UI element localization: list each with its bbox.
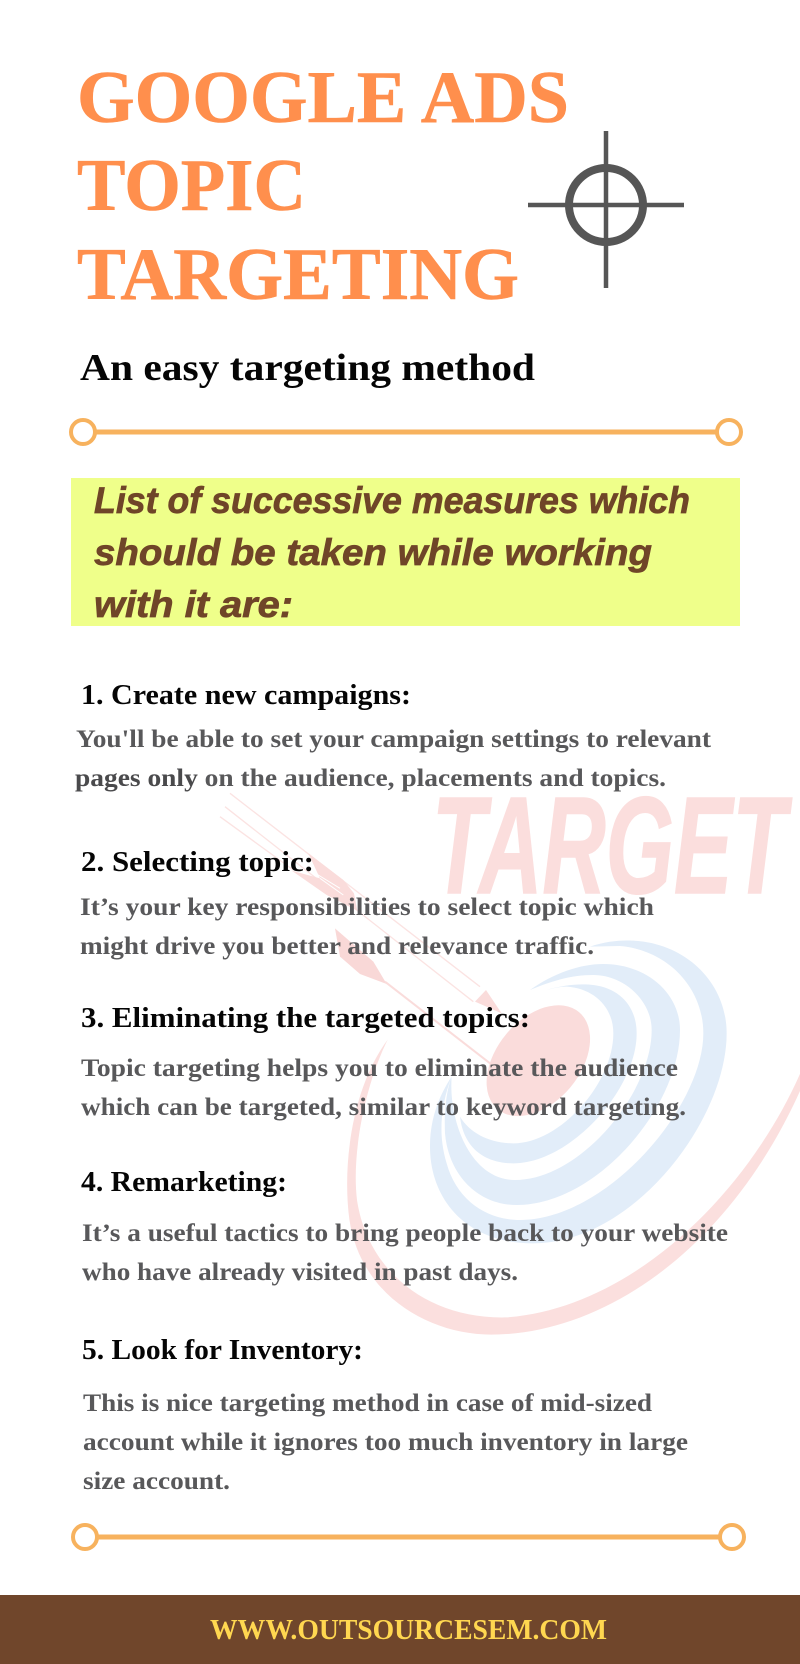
top divider bbox=[71, 420, 741, 444]
title bbox=[77, 57, 569, 316]
footer bar bbox=[0, 1595, 800, 1664]
step 1: You'll be able to set your campaign settings to relevant bbox=[76, 726, 712, 753]
arrow bbox=[220, 793, 502, 1063]
callout: list of measures: with it are: bbox=[94, 584, 293, 625]
callout: list of measures bbox=[71, 478, 740, 626]
step 4: It’s a useful tactics to bring people back to your website bbox=[82, 1220, 728, 1247]
subtitle: An easy targeting method bbox=[80, 347, 535, 389]
icon: crosshair bbox=[528, 131, 684, 288]
step 1: 1. Create new campaigns: bbox=[81, 680, 411, 711]
target rings bbox=[430, 940, 727, 1243]
step 1: pages only on the audience, placements and topics. bbox=[75, 765, 666, 792]
title: TARGETING bbox=[77, 234, 519, 316]
step 3 bbox=[81, 1003, 686, 1121]
callout: list of measures: List of successive measures which bbox=[94, 480, 690, 521]
step 4 bbox=[81, 1167, 728, 1286]
bottom divider bbox=[73, 1525, 744, 1549]
outer pink swoosh bbox=[347, 1040, 800, 1335]
step 5 bbox=[82, 1335, 688, 1495]
step 2: It’s your key responsibilities to select topic which bbox=[80, 894, 654, 921]
callout: list of measures: should be taken while working bbox=[94, 532, 652, 573]
title: GOOGLE ADS bbox=[77, 57, 569, 139]
title: TOPIC bbox=[77, 145, 306, 227]
step 4: who have already visited in past days. bbox=[82, 1259, 518, 1286]
bullseye bbox=[466, 985, 611, 1136]
step 5: 5. Look for Inventory: bbox=[82, 1335, 363, 1366]
background illustration: target with arrow bbox=[220, 769, 800, 1335]
step 3: which can be targeted, similar to keyword targeting. bbox=[81, 1094, 686, 1121]
step 5: account while it ignores too much inventory in large bbox=[83, 1429, 688, 1456]
step 2 bbox=[80, 847, 654, 960]
step 3: Topic targeting helps you to eliminate the audience bbox=[81, 1055, 678, 1082]
step 5: size account. bbox=[83, 1468, 230, 1495]
step 3: 3. Eliminating the targeted topics: bbox=[81, 1003, 530, 1034]
footer bar: WWW.OUTSOURCESEM.COM bbox=[210, 1615, 607, 1646]
step 5: This is nice targeting method in case of mid-sized bbox=[83, 1390, 652, 1417]
step 1 bbox=[75, 680, 712, 792]
step 2: 2. Selecting topic: bbox=[81, 847, 314, 878]
step 2: might drive you better and relevance traffic. bbox=[80, 933, 594, 960]
step 4: 4. Remarketing: bbox=[81, 1167, 287, 1198]
